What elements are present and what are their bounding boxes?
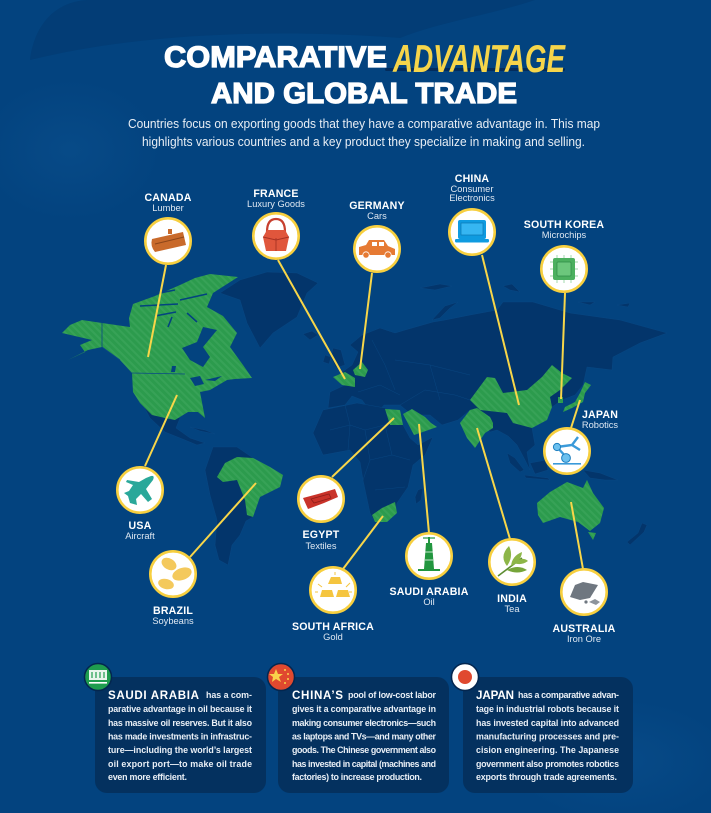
callout: south korea: SOUTH KOREA	[524, 219, 604, 231]
country: china	[470, 365, 572, 428]
icon: luxury bag	[263, 219, 289, 251]
callout: india: INDIA	[497, 593, 527, 605]
icon: car	[359, 240, 395, 258]
subtitle: Countries focus on exporting goods that they have a comparative advantage in. This map	[128, 116, 600, 131]
callout: south africa: SOUTH AFRICA	[292, 621, 374, 633]
callout: france: Luxury Goods	[247, 199, 305, 209]
callout: brazil: BRAZIL	[153, 605, 193, 617]
text: japan: has a comparative advan-	[518, 690, 619, 700]
country: canada and usa	[62, 274, 252, 420]
country: south korea	[558, 397, 563, 403]
icon: textiles	[303, 489, 338, 509]
country: japan	[563, 382, 591, 412]
callout: usa	[117, 467, 163, 541]
icon: laptop	[455, 220, 489, 242]
callout: france	[247, 188, 305, 259]
text: saudi arabia: ture—including the world’s largest	[108, 745, 252, 755]
land: south america	[205, 447, 283, 565]
land: siberian islands	[323, 284, 630, 368]
text: china: goods. The Chinese government also	[292, 745, 437, 755]
text: china: CHINA’S	[292, 689, 343, 702]
land: iceland	[303, 331, 318, 340]
callout: japan: Robotics	[582, 420, 618, 430]
callout: saudi arabia: SAUDI ARABIA	[389, 586, 469, 598]
callout: canada: Lumber	[152, 203, 184, 213]
land: madagascar	[415, 488, 423, 504]
country: france	[333, 372, 355, 387]
icon: microchip	[550, 255, 578, 283]
callout: south korea: Microchips	[542, 230, 587, 240]
callout: india	[489, 539, 535, 614]
callout: australia	[552, 569, 616, 644]
icon: oil derrick	[418, 537, 440, 571]
border lines	[102, 323, 185, 374]
callout: south africa: Gold	[323, 632, 343, 642]
callout: germany	[349, 200, 405, 272]
callout: saudi arabia	[389, 533, 469, 607]
land: central america and mexico	[142, 403, 215, 445]
panel: japan	[452, 664, 633, 793]
text: saudi arabia: has a com-	[206, 690, 252, 700]
text: japan: government also promotes robotics	[476, 759, 619, 769]
land: eurasia	[328, 302, 667, 470]
icon: soybeans	[157, 555, 193, 591]
text: japan: manufacturing processes and pre-	[476, 732, 619, 742]
callout: japan: JAPAN	[582, 409, 618, 421]
callout: egypt: EGYPT	[303, 529, 340, 541]
callout: germany: Cars	[367, 211, 387, 221]
callout: canada: CANADA	[144, 192, 192, 204]
flag: saudi arabia	[84, 664, 112, 690]
country: saudi arabia	[403, 409, 437, 435]
icon: aircraft	[124, 476, 154, 505]
text: saudi arabia: even more efficient.	[108, 772, 187, 782]
callout: south africa	[292, 567, 374, 642]
icon: gold bars	[315, 572, 352, 597]
text: saudi arabia	[108, 689, 253, 782]
text: japan	[476, 689, 619, 782]
icon: tea leaves	[498, 546, 528, 576]
icon: iron ore	[570, 582, 600, 605]
title	[164, 38, 566, 110]
callout: brazil: Soybeans	[152, 616, 194, 626]
text: china: as laptops and TVs—and many other	[292, 732, 437, 742]
text: japan: tage in industrial robots because it	[476, 704, 619, 714]
text: japan: cision engineering. The Japanese	[476, 745, 619, 755]
icon: lumber	[151, 229, 186, 252]
title: COMPARATIVE	[164, 41, 387, 74]
callout: china	[449, 173, 495, 255]
text: china: has invested in capital (machines and	[292, 759, 436, 769]
country: germany	[353, 362, 368, 377]
callout: south korea	[524, 219, 604, 292]
text: china: pool of low-cost labor	[348, 690, 437, 700]
title: ADVANTAGE	[392, 38, 566, 81]
panel: china	[268, 664, 449, 793]
land: greenland	[220, 272, 318, 348]
text: japan: exports through trade agreements.	[476, 772, 617, 782]
callout: australia: AUSTRALIA	[552, 623, 616, 635]
title: AND GLOBAL TRADE	[211, 78, 517, 110]
flag: japan	[452, 664, 478, 690]
subtitle: highlights various countries and a key product they specialize in making and selling.	[142, 134, 585, 149]
text: china: gives it a comparative advantage in	[292, 704, 436, 714]
callout: egypt: Textiles	[306, 541, 337, 551]
land: africa	[313, 403, 433, 523]
country: india	[460, 408, 493, 448]
callout: france: FRANCE	[253, 188, 299, 200]
text: saudi arabia: has made investments in infrastruc-	[108, 732, 252, 742]
text: japan: JAPAN	[476, 689, 514, 702]
country: south africa	[372, 502, 397, 522]
callout: japan	[544, 409, 618, 474]
country: egypt	[385, 409, 403, 425]
callout: china: CHINA	[455, 173, 489, 185]
callout: china: Electronics	[449, 193, 495, 203]
callout: china: Consumer	[451, 184, 493, 194]
subtitle	[128, 116, 600, 149]
callout: india: Tea	[504, 604, 520, 614]
connector lines	[145, 255, 583, 569]
text: china: factories) to increase production.	[292, 772, 422, 782]
country: australia	[537, 480, 604, 531]
callout: australia: Iron Ore	[567, 634, 601, 644]
text: saudi arabia: SAUDI ARABIA	[108, 689, 200, 702]
callout: usa: Aircraft	[125, 531, 155, 541]
land: new zealand	[627, 523, 647, 545]
text: china	[292, 689, 437, 782]
country: tasmania	[588, 532, 596, 540]
flag: china	[268, 664, 294, 690]
callout: brazil	[150, 551, 196, 626]
country: brazil	[217, 457, 283, 517]
callout: canada	[144, 192, 192, 264]
callout: usa: USA	[129, 520, 152, 532]
african and eurasian borders	[330, 340, 470, 490]
callout: saudi arabia: Oil	[423, 597, 435, 607]
panel: saudi arabia	[84, 664, 266, 793]
hudson bay and lakes	[171, 327, 222, 386]
icon: robot arm	[553, 437, 581, 465]
callout: egypt	[298, 476, 344, 551]
land: south east asia islands	[507, 430, 618, 480]
arctic channels	[140, 290, 207, 327]
text: saudi arabia: parative advantage in oil because it	[108, 704, 252, 714]
text: saudi arabia: has massive oil reserves. But it also	[108, 718, 253, 728]
world map	[62, 272, 667, 565]
callout: germany: GERMANY	[349, 200, 405, 212]
text: saudi arabia: oil export port—to make oil trade	[108, 759, 252, 769]
text: china: making consumer electronics—such	[292, 718, 436, 728]
text: japan: has invested capital into advanced	[476, 718, 619, 728]
